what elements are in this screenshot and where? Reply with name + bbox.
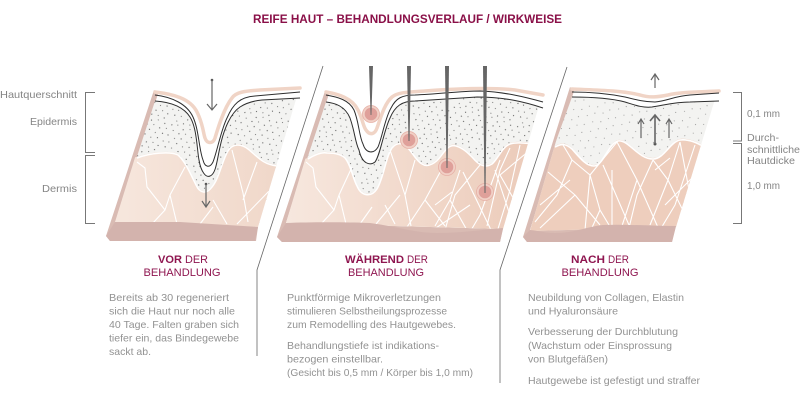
label: average skin thickness: Hautdicke — [747, 155, 795, 167]
wrinkle surface band — [326, 88, 543, 134]
heading: before: BEHANDLUNG — [144, 267, 220, 279]
base slab — [523, 225, 676, 242]
left brackets — [86, 92, 95, 224]
needle 4 with puncture — [476, 66, 494, 200]
text: during: (Gesicht bis 0,5 mm / Körper bis 1,0 mm) — [287, 367, 473, 379]
divider — [500, 67, 567, 383]
text: after: Verbesserung der Durchblutung — [528, 326, 678, 338]
text: during: zum Remodelling des Hautgewebes. — [287, 319, 456, 331]
heading: after: BEHANDLUNG — [562, 267, 638, 279]
arrow: surface up — [651, 74, 659, 88]
heading: during: BEHANDLUNG — [348, 267, 424, 279]
text: after: und Hyaluronsäure — [528, 306, 618, 318]
panel: during treatment — [277, 66, 548, 242]
arrow: tissue down — [202, 183, 210, 207]
label: 1,0 mm: 1,0 mm — [747, 180, 780, 192]
panel: after treatment — [520, 74, 725, 242]
skin layers — [286, 98, 539, 229]
text: during: bezogen einstellbar. — [287, 354, 383, 366]
heading: during: DER — [407, 254, 428, 266]
base slab — [277, 222, 503, 242]
label: average skin thickness: schnittliche — [747, 144, 800, 156]
text: after: (Wachstum oder Einsprossung — [528, 340, 672, 352]
label: Dermis: Dermis — [42, 183, 77, 195]
title: REIFE HAUT – BEHANDLUNGSVERLAUF / WIRKWEISE — [253, 12, 562, 26]
left edge strip — [106, 90, 258, 241]
text: after: von Blutgefäßen) — [528, 354, 608, 366]
label: Hautquerschnitt: Hautquerschnitt — [0, 89, 77, 101]
skin surface lines — [572, 92, 719, 107]
arrow: large collagen up — [650, 115, 660, 146]
right bracket — [733, 92, 742, 224]
heading: after: NACH — [571, 254, 605, 266]
needle 3 with puncture — [438, 66, 456, 176]
base slab — [106, 222, 258, 241]
label: average skin thickness: Durch- — [747, 132, 780, 144]
text: before: tiefer ein, das Bindegewebe — [109, 332, 239, 344]
skin surface lines — [155, 92, 300, 176]
left layer labels — [0, 89, 77, 195]
divider — [257, 66, 323, 356]
text: before: Bereits ab 30 regeneriert — [109, 292, 229, 304]
arrow: small up right — [666, 119, 672, 138]
heading: during: WÄHREND — [345, 253, 404, 266]
right thickness labels — [747, 108, 800, 192]
label: 0,1 mm: 0,1 mm — [747, 108, 780, 120]
needle 2 with puncture — [400, 66, 418, 148]
text: before: sich die Haut nur noch alle — [109, 306, 235, 318]
arrow: small up left — [638, 119, 644, 138]
heading: after: DER — [608, 254, 629, 266]
text: before: 40 Tage. Falten graben sich — [109, 319, 239, 331]
skin layers — [115, 98, 296, 227]
wrinkle surface band — [155, 88, 300, 142]
text: during: stimulieren Selbstheilungsprozesse — [287, 306, 447, 318]
needle 1 with puncture — [362, 66, 380, 122]
panel: before treatment — [100, 79, 305, 241]
left edge strip — [523, 87, 676, 242]
skin layers — [530, 97, 714, 231]
text: after: Neubildung von Collagen, Elastin — [528, 292, 684, 304]
arrow: wrinkle down — [207, 79, 217, 110]
text: before: sackt ab. — [109, 346, 151, 358]
text: during: Punktförmige Mikroverletzungen — [287, 292, 441, 304]
left edge strip — [277, 91, 503, 242]
skin surface lines — [326, 91, 543, 164]
text: during: Behandlungstiefe ist indikations- — [287, 340, 439, 352]
heading: before: DER — [185, 254, 208, 266]
text: after: Hautgewebe ist gefestigt und straffer — [528, 375, 701, 387]
label: Epidermis: Epidermis — [30, 116, 77, 128]
surface band — [572, 89, 719, 97]
heading: before: VOR — [158, 254, 182, 266]
